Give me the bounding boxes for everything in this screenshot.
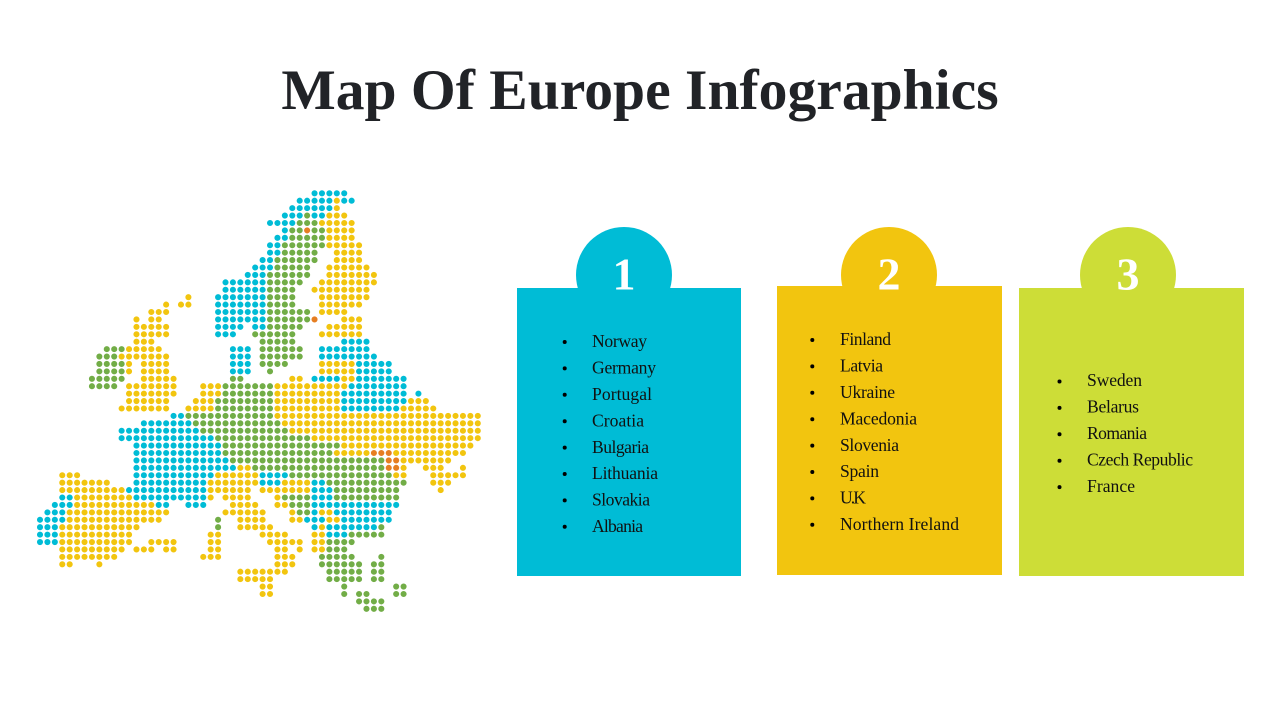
- country list 2: U.K: [840, 488, 866, 508]
- country list 1: Albania: [592, 516, 643, 536]
- country list 2: Northern Ireland: [840, 514, 959, 534]
- number badge 3: [1019, 227, 1244, 576]
- country list 3: Sweden: [1087, 370, 1142, 390]
- country list 2: Macedonia: [840, 408, 917, 428]
- number badge 1: [517, 227, 741, 576]
- yellow map dots: [62, 201, 478, 594]
- country list 2: Latvia: [840, 356, 883, 376]
- country list 1: [563, 331, 658, 536]
- country list 1: Croatia: [592, 410, 644, 430]
- dot map of Europe: [40, 193, 478, 609]
- country list 1: Portugal: [592, 384, 652, 404]
- number badge 2: [777, 227, 1002, 575]
- country list 3: Belarus: [1087, 397, 1139, 417]
- country list 3: Czech Republic: [1087, 449, 1193, 469]
- country list 3: [1058, 370, 1193, 496]
- blue map dots: [40, 193, 418, 542]
- country list 1: Lithuania: [592, 463, 658, 483]
- country list 1: Germany: [592, 358, 656, 378]
- orange map dots: [307, 230, 396, 468]
- panel: list 3 (lime): [1019, 227, 1244, 576]
- country list 2: Ukraine: [840, 382, 895, 402]
- country list 2: Slovenia: [840, 435, 899, 455]
- country list 1: Slovakia: [592, 490, 650, 510]
- country list 2: Finland: [840, 329, 891, 349]
- country list 3: France: [1087, 476, 1135, 496]
- number badge 3: 3: [1116, 248, 1140, 300]
- green map dots: [92, 216, 404, 609]
- country list 2: [810, 329, 959, 534]
- country list 3: Romania: [1087, 423, 1147, 443]
- title: Map Of Europe Infographics: [281, 59, 999, 122]
- panel: list 2 (yellow): [777, 227, 1002, 575]
- panel: list 1 (blue): [517, 227, 741, 576]
- number badge 1: 1: [612, 248, 636, 300]
- number badge 2: 2: [878, 248, 900, 300]
- country list 1: Bulgaria: [592, 437, 649, 457]
- country list 2: Spain: [840, 461, 879, 481]
- country list 1: Norway: [592, 331, 647, 351]
